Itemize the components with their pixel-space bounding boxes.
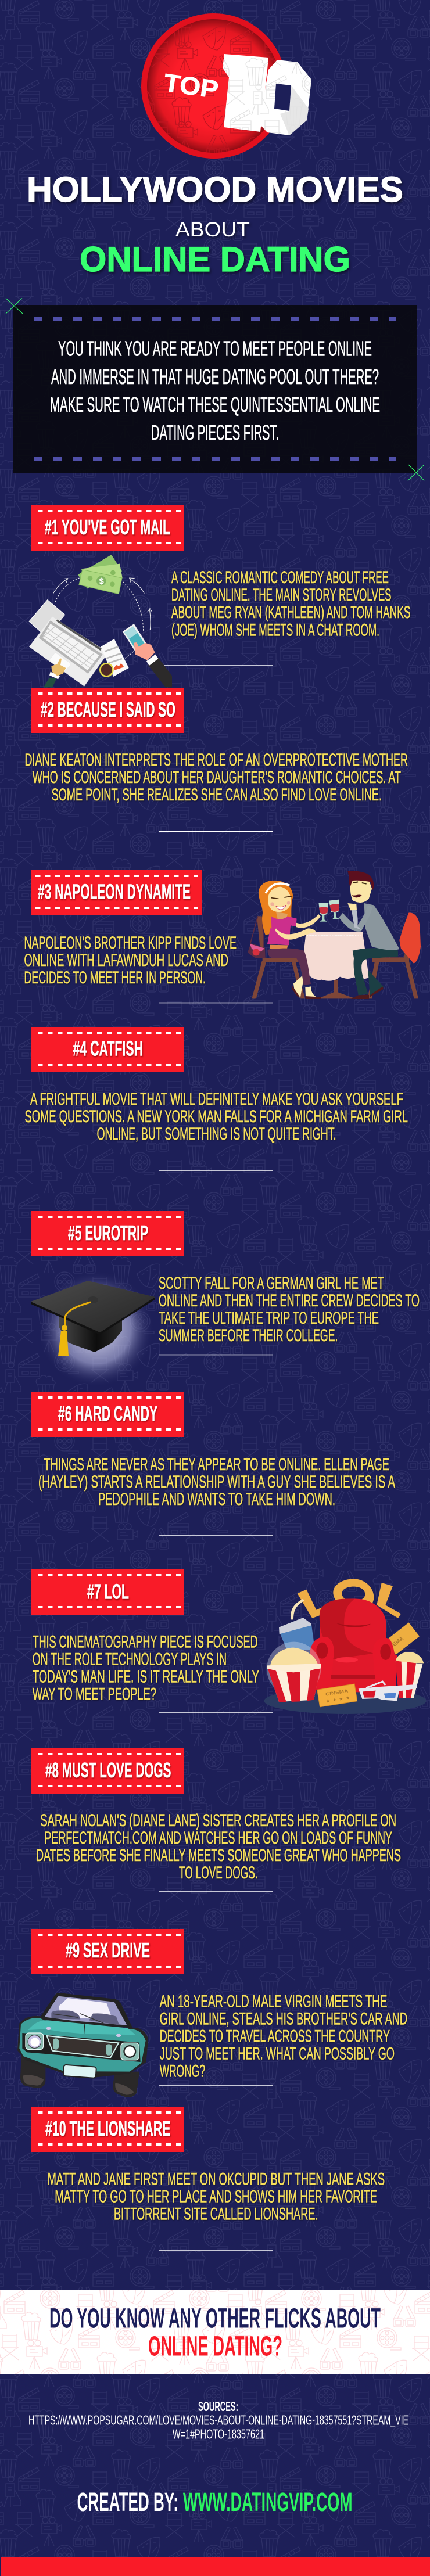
- title line: About: ABOUT: [175, 218, 250, 241]
- jacket on chair: [399, 912, 421, 963]
- banner: #5: #5 EUROTRIP: [68, 1221, 148, 1245]
- banner: #5: [31, 1211, 184, 1256]
- handbag: [248, 917, 266, 958]
- banner: #1: #1 YOU'VE GOT MAIL: [45, 515, 170, 539]
- panel: intro: [6, 299, 424, 481]
- banner: #8: #8 MUST LOVE DOGS: [45, 1758, 171, 1782]
- illustration: couple on a date: [248, 871, 421, 999]
- text: #7 description: THIS CINEMATOGRAPHY PIECE IS FOCUSED: [33, 1632, 258, 1652]
- arrows: [53, 578, 152, 658]
- text: #9 description: WRONG?: [160, 2062, 205, 2081]
- text: #2 description: [24, 750, 408, 804]
- banner: #10: [31, 2107, 184, 2152]
- banner: #3: #3 NAPOLEON DYNAMITE: [38, 879, 191, 904]
- left chair: [252, 916, 305, 998]
- credit: CREATED BY:: [77, 2487, 178, 2517]
- text: #7 description: [33, 1632, 259, 1704]
- cinema ticket: [317, 1684, 357, 1707]
- title line: Hollywood Movies: HOLLYWOOD MOVIES: [27, 170, 403, 209]
- text: #5 description: [159, 1274, 420, 1345]
- banner: #7: #7 LOL: [87, 1580, 129, 1603]
- paper stack: [29, 600, 65, 637]
- text: #7 description: WAY TO MEET PEOPLE?: [33, 1684, 156, 1704]
- illustration: teal car: [17, 1993, 148, 2097]
- text: #3 description: DECIDES TO MEET HER IN PERSON.: [24, 968, 206, 987]
- banner: #7: [31, 1569, 184, 1615]
- banner: #8: [31, 1748, 184, 1794]
- text: #9 description: [160, 1992, 407, 2081]
- badge number: 10: [223, 54, 311, 135]
- intro text: DATING PIECES FIRST.: [151, 421, 279, 444]
- table: [304, 932, 369, 998]
- ticket behind: EMA: [392, 1636, 404, 1647]
- footer bar: [1, 2557, 430, 2576]
- LOL letters: [298, 1579, 401, 1618]
- banner: #4: #4 CATFISH: [73, 1036, 143, 1061]
- banner: #6: [31, 1392, 184, 1437]
- cinema ticket: ★★★★: [325, 1695, 350, 1704]
- text: #7 description: TODAY'S MAN LIFE. IS IT REALLY THE ONLY: [33, 1667, 259, 1687]
- text: #8 description: [36, 1811, 401, 1882]
- banner: #3: [31, 870, 202, 915]
- woman: [259, 881, 321, 999]
- banner: #10: #10 THE LIONSHARE: [45, 2117, 171, 2140]
- car body: [17, 2016, 148, 2078]
- text: #7 description: ON THE ROLE TECHNOLOGY PLAYS IN: [33, 1650, 227, 1669]
- banner: #4: [31, 1027, 184, 1072]
- icon: green cross top left: [6, 299, 23, 314]
- text: #3 description: ONLINE WITH LAFAWNDUH LUCAS AND: [24, 951, 228, 970]
- illustration: laptop, money and phone: [29, 555, 172, 687]
- text: #3 description: NAPOLEON'S BROTHER KIPP FINDS LOVE: [24, 933, 236, 953]
- right chair: [368, 915, 418, 998]
- wine glasses: [318, 900, 340, 922]
- illustration: graduation cap: [31, 1271, 155, 1387]
- cinema seat: [310, 1599, 397, 1692]
- question line 2: ONLINE DATING?: [148, 2331, 282, 2362]
- title line: Online Dating: ONLINE DATING: [80, 240, 350, 279]
- floor shadow: [264, 1688, 426, 1714]
- title: [27, 170, 403, 279]
- grille: [47, 2036, 119, 2058]
- banner: #1: [31, 505, 184, 551]
- text: #10 description: [48, 2169, 385, 2223]
- text: #1 description: [171, 568, 410, 640]
- laptop: [29, 617, 109, 687]
- wheels: [20, 2056, 139, 2097]
- sources: [28, 2399, 408, 2442]
- text: #4 description: [24, 1090, 408, 1144]
- drink: [279, 1599, 315, 1650]
- banner: #2: [31, 688, 184, 733]
- ticket behind: [385, 1622, 420, 1655]
- cinema ticket: CINEMA: [325, 1688, 349, 1697]
- badge word: TOP: TOP: [162, 69, 220, 104]
- small popcorn box: [395, 1652, 424, 1698]
- sources: SOURCES:: [198, 2399, 238, 2414]
- text: #3 description: [24, 933, 236, 987]
- banner: #9: #9 SEX DRIVE: [66, 1938, 150, 1962]
- money: $: [99, 577, 104, 587]
- cabin and windshield: [39, 1993, 132, 2028]
- badge: Top 10: [141, 13, 311, 159]
- panel: closing question: [0, 2290, 430, 2374]
- text: #6 description: [38, 1455, 395, 1509]
- banner: #2: #2 BECAUSE I SAID SO: [41, 698, 175, 721]
- text: #8 description: TO LOVE DOGS.: [179, 1863, 258, 1882]
- licence plate: [63, 2065, 96, 2078]
- intro text: [50, 337, 380, 444]
- report sheet and coffee: [99, 639, 129, 677]
- phone and hand: [123, 624, 172, 687]
- hand on touchpad: [44, 658, 66, 687]
- 3D glasses: [359, 1682, 417, 1701]
- banner: #9: [31, 1929, 184, 1974]
- illustration: cinema seat, popcorn and LOL: [264, 1579, 426, 1714]
- headlights: [26, 2033, 139, 2060]
- sources: W=1#PHOTO-18357621: [173, 2427, 264, 2442]
- money: [78, 555, 123, 594]
- banner: #6: #6 HARD CANDY: [58, 1402, 157, 1425]
- icon: green cross bottom right: [408, 465, 424, 481]
- credit: [77, 2487, 352, 2517]
- man: [339, 871, 399, 999]
- popcorn bucket: [267, 1642, 321, 1702]
